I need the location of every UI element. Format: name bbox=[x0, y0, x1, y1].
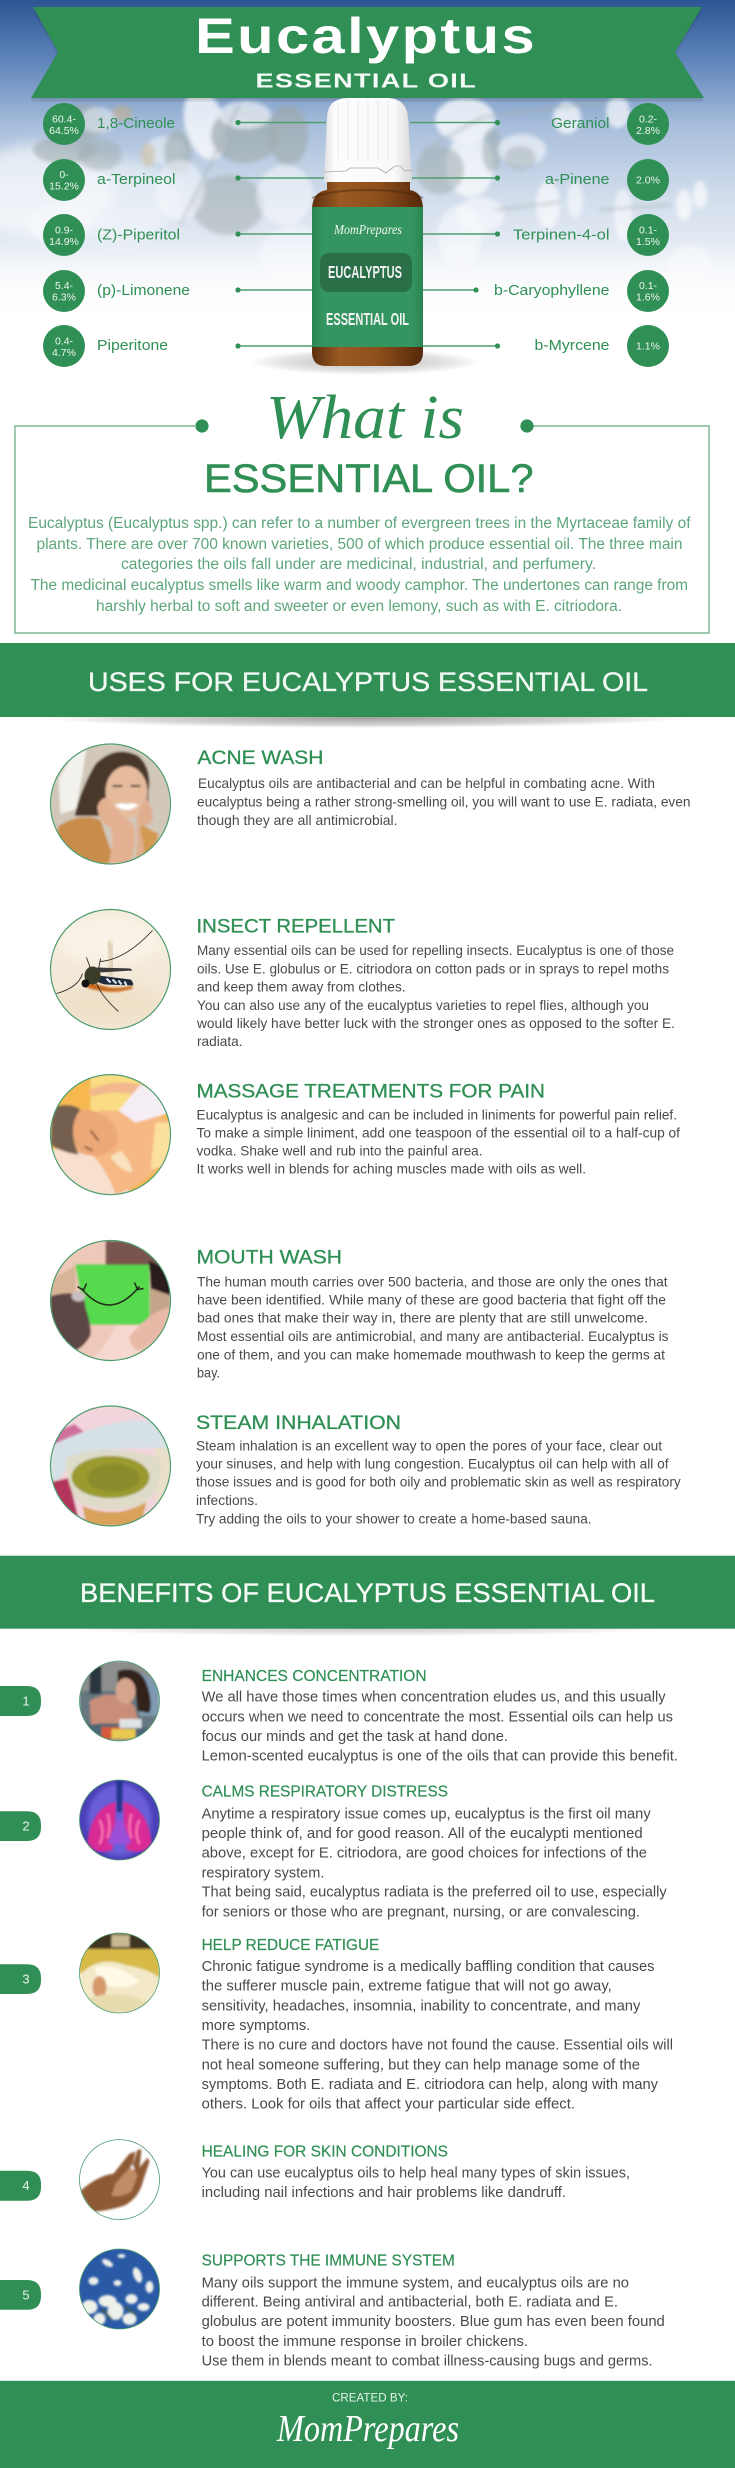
left compounds bbox=[43, 103, 190, 367]
compound: (p)-Limonene bbox=[43, 270, 190, 312]
compound: (Z)-Piperitol: (Z)-Piperitol bbox=[97, 228, 180, 244]
body text: the sufferer muscle pain, extreme fatigue that will not go away, bbox=[202, 1979, 612, 1995]
compound: (p)-Limonene: 6.3% bbox=[52, 292, 76, 304]
heading: ESSENTIAL OIL? bbox=[204, 457, 534, 501]
body text: It works well in blends for aching muscles made with oils as well. bbox=[196, 1162, 586, 1177]
panel: what is essential oil bbox=[15, 384, 709, 633]
compound: a-Terpineol: 15.2% bbox=[49, 180, 79, 192]
photo: lungs bbox=[80, 1780, 160, 1860]
compound: 1,8-Cineole bbox=[43, 103, 175, 145]
heading: ENHANCES CONCENTRATION bbox=[202, 1668, 427, 1685]
compound: 1,8-Cineole: 1,8-Cineole bbox=[97, 116, 175, 132]
body text: symptoms. Both E. radiata and E. citriodora can help, along with many bbox=[202, 2077, 659, 2093]
body text: You can use eucalyptus oils to help heal many types of skin issues, bbox=[202, 2166, 630, 2182]
description bbox=[28, 515, 691, 615]
compound: Geraniol bbox=[551, 103, 669, 145]
body text: have been identified. While many of these are good bacteria that fight off the bbox=[197, 1293, 666, 1308]
logo wordmark: MomPrepares bbox=[276, 2408, 459, 2450]
body text bbox=[202, 1690, 678, 1764]
heading: MOUTH WASH bbox=[196, 1247, 342, 1268]
compound: (p)-Limonene: 5.4- bbox=[55, 280, 74, 292]
body text: Anytime a respiratory issue comes up, eucalyptus is the first oil many bbox=[202, 1806, 651, 1822]
compound: a-Pinene: a-Pinene bbox=[545, 172, 610, 188]
benefits section band bbox=[0, 1556, 735, 1636]
benefit 3: help reduce fatigue bbox=[0, 1933, 673, 2112]
compound: Terpinen-4-ol: 0.1- bbox=[639, 224, 658, 236]
number tab: 5 bbox=[22, 2288, 30, 2302]
compound: b-Caryophyllene bbox=[494, 270, 669, 312]
description: The medicinal eucalyptus smells like warm and woody camphor. The undertones can range from bbox=[30, 577, 688, 594]
compound: a-Pinene: 2.0% bbox=[636, 174, 660, 186]
benefit 4: healing for skin conditions bbox=[0, 2140, 630, 2220]
essential oil bottle bbox=[250, 98, 480, 375]
body text: respiratory system. bbox=[202, 1865, 324, 1881]
bottle logo: MomPrepares bbox=[333, 223, 402, 238]
compound: Piperitone: 4.7% bbox=[52, 347, 76, 359]
body text: one of them, and you can make homemade mouthwash to keep the germs at bbox=[197, 1347, 665, 1362]
body text: Many oils support the immune system, and eucalyptus oils are no bbox=[202, 2276, 629, 2292]
photo: massage bbox=[50, 1075, 170, 1195]
use: mouth wash bbox=[50, 1240, 669, 1380]
body text: infections. bbox=[196, 1493, 258, 1508]
photo: mosquito on skin bbox=[50, 910, 170, 1030]
body text: occurs when we need to concentrate the most. Essential oils can help us bbox=[202, 1709, 673, 1725]
photo: hands bbox=[80, 2140, 160, 2220]
body text: would likely have better luck with the stronger ones as opposed to the softer E. bbox=[196, 1016, 675, 1031]
body text: others. Look for oils that affect your particular side effect. bbox=[202, 2096, 575, 2112]
bottle essential oil label: ESSENTIAL OIL bbox=[326, 309, 409, 329]
photo: herbal steam bowl bbox=[50, 1406, 170, 1526]
compound: Geraniol: 2.8% bbox=[636, 125, 660, 137]
compound: b-Caryophyllene: b-Caryophyllene bbox=[494, 283, 610, 299]
body text: more symptoms. bbox=[202, 2018, 310, 2034]
heading: INSECT REPELLENT bbox=[196, 916, 395, 937]
body text bbox=[196, 1439, 681, 1526]
essential oil bottle: EUCALYPTUS bbox=[328, 262, 402, 282]
number tab: 4 bbox=[22, 2178, 30, 2193]
body text: radiata. bbox=[197, 1034, 242, 1049]
number tab bbox=[0, 1811, 41, 1841]
use: massage treatments for pain bbox=[50, 1075, 680, 1195]
heading: STEAM INHALATION bbox=[196, 1413, 401, 1434]
compound: (Z)-Piperitol bbox=[43, 214, 180, 256]
photo: eucalyptus leaves on blue sky bbox=[80, 2249, 160, 2329]
uses section band: USES FOR EUCALYPTUS ESSENTIAL OIL bbox=[88, 667, 648, 697]
body text: oils. Use E. globulus or E. citriodora on cotton pads or in sprays to repel moths bbox=[197, 961, 669, 976]
use: insect repellent bbox=[50, 910, 675, 1049]
heading: CALMS RESPIRATORY DISTRESS bbox=[202, 1784, 448, 1801]
photo: smile note bbox=[50, 1240, 170, 1360]
number tab bbox=[0, 2171, 41, 2201]
compound: b-Myrcene: 1.1% bbox=[636, 340, 660, 352]
body text: people think of, and for good reason. All of the eucalypti mentioned bbox=[202, 1826, 643, 1842]
compound: (Z)-Piperitol: 0.9- bbox=[55, 224, 74, 236]
body text: Many essential oils can be used for repelling insects. Eucalyptus is one of those bbox=[197, 943, 674, 958]
compound: a-Terpineol: 0- bbox=[59, 169, 69, 181]
compound: Geraniol: Geraniol bbox=[551, 116, 610, 132]
photo: resting in bed bbox=[80, 1933, 160, 2013]
body text: The human mouth carries over 500 bacteria, and those are only the ones that bbox=[197, 1275, 668, 1290]
compound: Terpinen-4-ol bbox=[513, 214, 669, 256]
body text: Steam inhalation is an excellent way to open the pores of your face, clear out bbox=[196, 1439, 662, 1454]
body text: You can also use any of the eucalyptus varieties to repel flies, although you bbox=[197, 998, 649, 1013]
body text: We all have those times when concentration eludes us, and this usually bbox=[202, 1690, 666, 1706]
number tab bbox=[0, 1686, 41, 1716]
compound: (Z)-Piperitol: 14.9% bbox=[49, 236, 79, 248]
compound: Piperitone: Piperitone bbox=[97, 338, 168, 354]
hero background: sky and eucalyptus leaves bbox=[0, 0, 735, 320]
compound: Piperitone bbox=[43, 325, 168, 367]
body text: Use them in blends meant to combat illness-causing bugs and germs. bbox=[202, 2353, 653, 2369]
number tab: 2 bbox=[22, 1818, 30, 1834]
body text: vodka. Shake well and rub into the painful area. bbox=[196, 1143, 482, 1158]
body text: bad ones that make their way in, there are plenty that are still unwelcome. bbox=[197, 1311, 648, 1326]
compound: Terpinen-4-ol: 1.5% bbox=[636, 236, 660, 248]
heading: MASSAGE TREATMENTS FOR PAIN bbox=[196, 1082, 545, 1103]
body text: different. Being antiviral and antibacterial, both E. radiata and E. bbox=[202, 2295, 618, 2311]
uses section band bbox=[0, 643, 735, 728]
compound: a-Pinene bbox=[545, 159, 669, 201]
body text bbox=[202, 1959, 673, 2112]
body text: for seniors or those who are pregnant, nursing, or are convalescing. bbox=[202, 1904, 640, 1920]
script heading: What is bbox=[266, 384, 464, 452]
compound: b-Myrcene bbox=[534, 325, 669, 367]
compound: Piperitone: 0.4- bbox=[55, 336, 74, 348]
number tab bbox=[0, 2280, 41, 2310]
bottle name plate bbox=[320, 253, 412, 292]
body text: Lemon-scented eucalyptus is one of the oils that can provide this benefit. bbox=[202, 1748, 678, 1764]
benefit 5: supports the immune system bbox=[0, 2249, 665, 2369]
body text: Most essential oils are antimicrobial, and many are antibacterial. Eucalyptus is bbox=[197, 1329, 669, 1344]
compound: 1,8-Cineole: 64.5% bbox=[49, 125, 79, 137]
heading: HEALING FOR SKIN CONDITIONS bbox=[202, 2143, 448, 2160]
body text: Eucalyptus is analgesic and can be included in liniments for powerful pain relief. bbox=[196, 1107, 677, 1122]
connector lines bbox=[235, 120, 500, 349]
body text bbox=[196, 1107, 680, 1177]
body text bbox=[202, 2166, 630, 2201]
footer bbox=[0, 2381, 735, 2468]
body text: focus our minds and get the task at hand done. bbox=[202, 1729, 508, 1745]
description: harshly herbal to soft and sweeter or even lemony, such as with E. citriodora. bbox=[96, 598, 622, 615]
compound: b-Myrcene: b-Myrcene bbox=[534, 338, 610, 354]
body text bbox=[202, 1806, 667, 1920]
photo: woman concentrating bbox=[80, 1661, 160, 1741]
heading: ACNE WASH bbox=[197, 748, 323, 769]
number tab: 3 bbox=[22, 1972, 30, 1986]
number tab bbox=[0, 1964, 41, 1994]
body text: bay. bbox=[197, 1365, 220, 1380]
body text: To make a simple liniment, add one teaspoon of the essential oil to a half-cup of bbox=[196, 1125, 680, 1140]
compound: a-Terpineol bbox=[43, 159, 176, 201]
body text bbox=[197, 1275, 669, 1380]
benefit 1: enhances concentration bbox=[0, 1661, 678, 1764]
photo: smiling woman bbox=[50, 744, 170, 864]
compound: Terpinen-4-ol: Terpinen-4-ol bbox=[513, 228, 610, 244]
body text: sensitivity, headaches, insomnia, inability to concentrate, and many bbox=[202, 1999, 641, 2015]
created by label: CREATED BY: bbox=[332, 2393, 408, 2405]
body text: Try adding the oils to your shower to create a home-based sauna. bbox=[196, 1511, 592, 1526]
compound: Geraniol: 0.2- bbox=[639, 114, 658, 126]
body text: those issues and is good for both oily and problematic skin as well as respiratory bbox=[196, 1475, 681, 1490]
use: acne wash bbox=[50, 744, 690, 864]
description: Eucalyptus (Eucalyptus spp.) can refer to a number of evergreen trees in the Myrtaceae family of bbox=[28, 515, 691, 532]
body text: your sinuses, and help with lung congestion. Eucalyptus oil can help with all of bbox=[196, 1457, 669, 1472]
body text: globulus are potent immunity boosters. Blue gum has even been found bbox=[202, 2314, 665, 2330]
use: steam inhalation bbox=[50, 1406, 681, 1526]
body text: not heal someone suffering, but they can help manage some of the bbox=[202, 2057, 640, 2073]
body text bbox=[196, 943, 675, 1049]
benefit 2: calms respiratory distress bbox=[0, 1780, 667, 1920]
title: Eucalyptus bbox=[195, 8, 537, 64]
compound: 1,8-Cineole: 60.4- bbox=[52, 114, 76, 126]
description: categories the oils fall under are medicinal, industrial, and perfumery. bbox=[121, 556, 596, 573]
benefits section band: BENEFITS OF EUCALYPTUS ESSENTIAL OIL bbox=[80, 1578, 655, 1608]
body text bbox=[202, 2276, 665, 2369]
subtitle: ESSENTIAL OIL bbox=[256, 70, 477, 92]
top title ribbon bbox=[31, 7, 704, 101]
body text: Eucalyptus oils are antibacterial and can be helpful in combating acne. With bbox=[198, 776, 655, 791]
body text: There is no cure and doctors have not found the cause. Essential oils will bbox=[202, 2037, 673, 2053]
body text: Chronic fatigue syndrome is a medically baffling condition that causes bbox=[202, 1959, 654, 1975]
body text bbox=[197, 776, 690, 828]
body text: including nail infections and hair problems like dandruff. bbox=[202, 2185, 566, 2201]
compound: a-Terpineol: a-Terpineol bbox=[97, 172, 176, 188]
compound: (p)-Limonene: (p)-Limonene bbox=[97, 283, 190, 299]
body text: That being said, eucalyptus radiata is the preferred oil to use, especially bbox=[202, 1885, 667, 1901]
heading: HELP REDUCE FATIGUE bbox=[202, 1937, 379, 1954]
body text: eucalyptus being a rather strong-smelling oil, you will want to use E. radiata, even bbox=[197, 795, 690, 810]
body text: though they are all antimicrobial. bbox=[197, 813, 398, 828]
body text: to boost the immune response in broiler chickens. bbox=[202, 2334, 528, 2350]
number tab: 1 bbox=[22, 1694, 30, 1708]
compound: b-Caryophyllene: 1.6% bbox=[636, 292, 660, 304]
description: plants. There are over 700 known varieties, 500 of which produce essential oil. The three main bbox=[36, 536, 682, 553]
body text: and keep them away from clothes. bbox=[197, 980, 406, 995]
body text: above, except for E. citriodora, are good choices for infections of the bbox=[202, 1846, 647, 1862]
heading: SUPPORTS THE IMMUNE SYSTEM bbox=[202, 2252, 455, 2270]
right compounds bbox=[494, 103, 669, 367]
compound: b-Caryophyllene: 0.1- bbox=[639, 280, 658, 292]
